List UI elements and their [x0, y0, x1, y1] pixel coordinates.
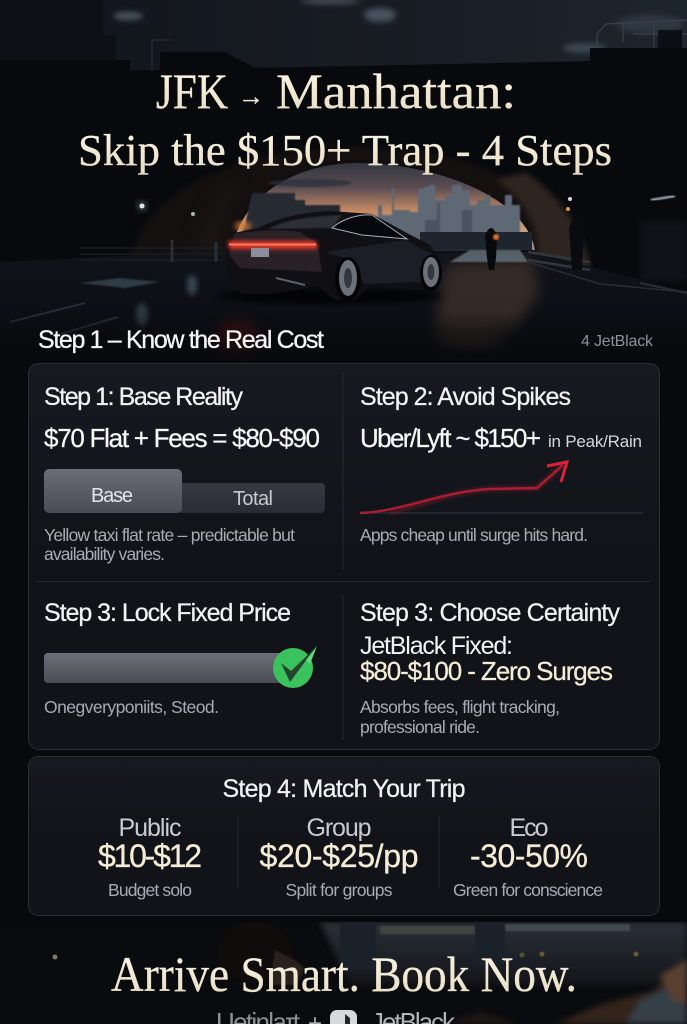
step 2: avoid spikes	[360, 383, 643, 545]
option: group	[260, 814, 418, 900]
section heading: Step 1 – Know the Real Cost	[38, 326, 324, 354]
sunset opening with skyline	[232, 163, 535, 250]
hero scene: night city tunnel	[0, 0, 687, 400]
panel: step 4 match your trip	[28, 756, 660, 916]
panel: step 4 match your trip: Step 4: Match Your Trip	[222, 775, 466, 803]
option: eco: -30-50%	[470, 838, 588, 874]
panel: steps 1 to 3	[28, 364, 660, 750]
option: group: $20-$25/pp	[260, 838, 418, 874]
guard rails and figures	[80, 214, 590, 270]
black car	[218, 211, 442, 304]
step 2: avoid spikes: Step 2: Avoid Spikes	[360, 383, 571, 411]
step 1: base reality	[44, 383, 325, 564]
tunnel lamps	[137, 197, 572, 216]
title: →	[238, 82, 264, 111]
left buildings	[0, 0, 116, 90]
wall and garage at right	[640, 196, 687, 281]
title: JFK	[156, 63, 228, 119]
icon: green check	[273, 646, 317, 688]
footer banner scene	[0, 918, 687, 1024]
option: eco	[453, 814, 603, 900]
step 1: base reality: Step 1: Base Reality	[44, 383, 244, 411]
progress bar	[44, 653, 286, 683]
bar chart: base vs total: Total	[233, 488, 273, 510]
step 3: lock fixed price	[44, 599, 317, 717]
bar chart: base vs total: Base	[91, 485, 133, 507]
step 1: base reality: availability varies.	[44, 544, 165, 564]
step 3: choose certainty	[360, 599, 620, 737]
option: eco: Green for conscience	[453, 880, 603, 900]
option: group: Split for groups	[286, 880, 393, 900]
option: public: Budget solo	[108, 880, 192, 900]
option: public: $10-$12	[98, 838, 202, 874]
title	[78, 63, 612, 175]
reclining passenger	[445, 958, 687, 1024]
hero fade	[0, 310, 687, 366]
option: public: Public	[118, 814, 182, 842]
step 1: base reality: Yellow taxi flat rate – predictable but	[44, 525, 295, 545]
step 3: choose certainty: Step 3: Choose Certainty	[360, 599, 620, 627]
step 3: lock fixed price: Onegveryponiits, Steod.	[44, 697, 219, 717]
bar chart: base vs total	[44, 469, 325, 513]
passenger silhouette	[217, 922, 304, 985]
option: public	[98, 814, 202, 900]
city through window	[0, 918, 687, 985]
step 2: avoid spikes: Apps cheap until surge hits hard.	[360, 525, 588, 545]
stone arch	[130, 147, 592, 275]
option: eco: Eco	[510, 814, 548, 842]
bridge structure	[0, 20, 687, 400]
step 3: choose certainty: professional ride.	[360, 717, 480, 737]
title: Manhattan:	[276, 63, 516, 119]
step 3: lock fixed price: Step 3: Lock Fixed Price	[44, 599, 291, 627]
step 2: avoid spikes: in Peak/Rain	[548, 432, 642, 451]
step 1: base reality: $70 Flat + Fees = $80-$90	[44, 423, 320, 453]
step 3: choose certainty: $80-$100 - Zero Surges	[360, 656, 613, 686]
sky with clouds	[0, 0, 687, 90]
option: group: Group	[306, 814, 372, 842]
road	[0, 252, 687, 360]
call to action headline: Arrive Smart. Book Now.	[111, 946, 577, 1002]
brand tag: 4 JetBlack	[581, 333, 654, 350]
step 3: choose certainty: Absorbs fees, flight tracking,	[360, 697, 560, 717]
title: Skip the $150+ Trap - 4 Steps	[78, 126, 612, 175]
step 2: avoid spikes: Uber/Lyft ~ $150+	[360, 423, 541, 453]
wet road reflections	[10, 250, 687, 358]
icon: app logo	[330, 1010, 357, 1024]
footer logos	[216, 1007, 456, 1024]
chart: surge price spike arrow	[360, 462, 643, 513]
step 3: choose certainty: JetBlack Fixed:	[360, 632, 513, 660]
